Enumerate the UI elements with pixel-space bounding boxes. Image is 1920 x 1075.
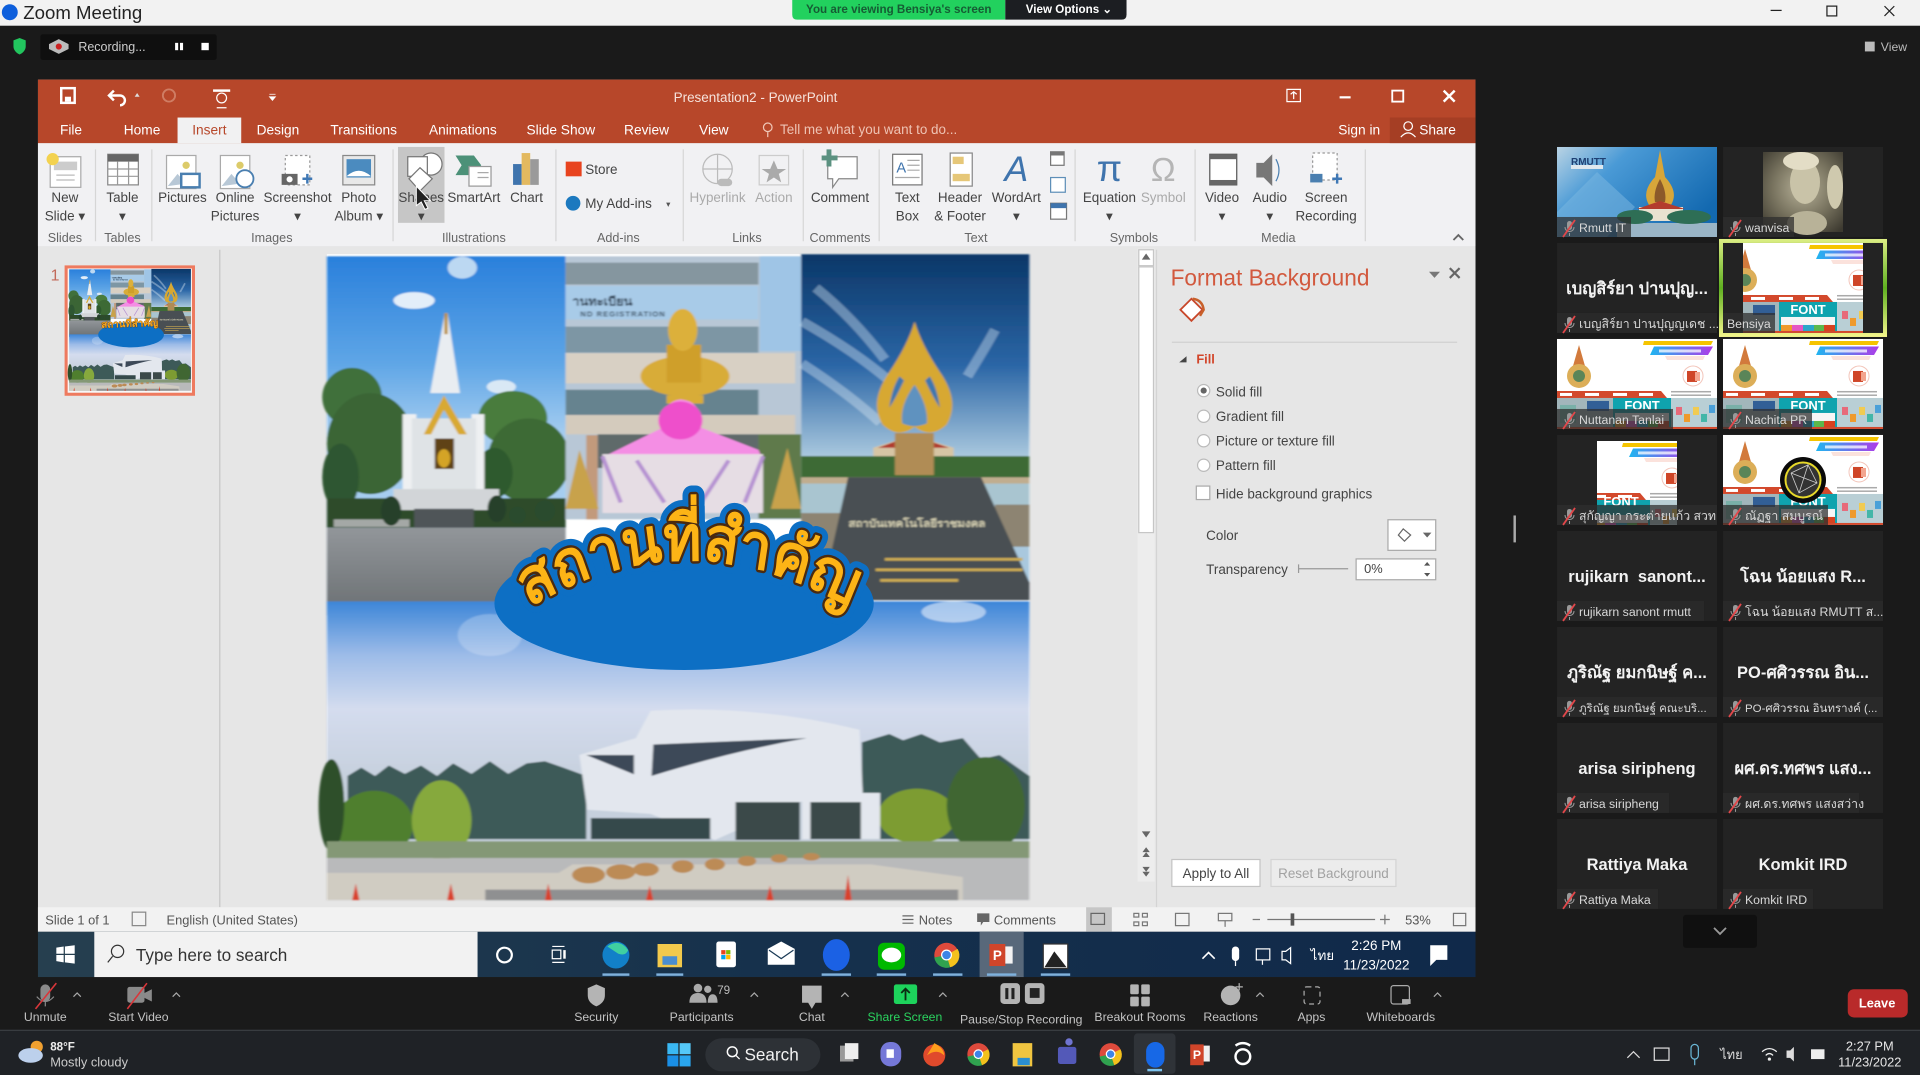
start button (667, 1043, 691, 1066)
system tray: 2:26 PM (1351, 938, 1401, 953)
ribbon button: screenshot: Screenshot (264, 190, 332, 205)
ribbon button: screen recording: Recording (1295, 208, 1357, 223)
start button (56, 945, 75, 964)
ribbon button: wordart: WordArt (992, 190, 1041, 205)
participant tile: PO-ศศิวรรณ (1723, 627, 1883, 717)
system tray: 11/23/2022 (1838, 1054, 1901, 1069)
ribbon button: table: ▾ (119, 208, 126, 223)
ribbon group labels: Images (251, 231, 293, 245)
slide thumbnail pane (51, 250, 220, 907)
ribbon group labels: Slides (48, 231, 82, 245)
ribbon tabs: Share (1419, 123, 1456, 138)
ribbon group labels: Add-ins (597, 231, 640, 245)
ribbon button: shapes (398, 153, 444, 223)
ribbon button: equation: Equation (1083, 190, 1136, 205)
fill section (1179, 352, 1436, 580)
slide scrollbar (1138, 249, 1155, 882)
powerpoint status bar (38, 907, 1476, 932)
shared windows 10 taskbar (38, 932, 1476, 977)
ribbon button: smartart (447, 155, 501, 205)
slide thumbnail pane: 1 (51, 267, 60, 284)
fill section: Color (1206, 528, 1239, 543)
ribbon button: my add-ins: My Add-ins (585, 196, 652, 211)
ribbon tabs (60, 118, 1476, 143)
ribbon button: pictures: Pictures (158, 190, 207, 205)
unmute control (24, 983, 81, 1024)
ribbon button: screenshot: ▾ (294, 208, 301, 223)
ribbon button: store: Store (585, 162, 617, 177)
chat control (799, 986, 849, 1024)
windows 11 taskbar (0, 1030, 1920, 1075)
ribbon button: comment (811, 149, 869, 205)
fill section: Gradient fill (1216, 409, 1284, 424)
participant tile: rujikarn sanont: rujikarn sanont rmutt (1579, 605, 1692, 619)
participant tile: Rmutt IT: Rmutt IT (1579, 221, 1627, 235)
start video control: Start Video (108, 1010, 169, 1024)
ribbon button: text box: Text (895, 190, 920, 205)
ribbon button: video: ▾ (1219, 208, 1226, 223)
participant tile: PO-ศศิวรรณ: PO-ศศิวรรณ อินทรางค์ (... (1745, 701, 1877, 715)
apply to all button: Apply to All (1183, 866, 1249, 881)
security control: Security (574, 1010, 619, 1024)
ribbon group labels: Links (732, 231, 762, 245)
ribbon button: action (755, 155, 793, 205)
ribbon button: audio: ▾ (1266, 208, 1273, 223)
participant tile: Komkit IRD (1723, 819, 1883, 909)
ribbon tabs: Design (257, 123, 299, 138)
participant tile: Komkit IRD: Komkit IRD (1745, 893, 1807, 907)
ribbon tabs: Insert (192, 123, 227, 138)
fill bucket icon (1180, 299, 1204, 321)
participant tile: wanvisa: wanvisa (1744, 221, 1790, 235)
search box (94, 932, 478, 977)
ribbon button: table: Table (106, 190, 139, 205)
active speaker tile: Bensiya: Bensiya (1727, 317, 1771, 331)
participant tile: ผศ.ดร.ทศพร แสงสว่าง: ผศ.ดร.ทศพร แสง... (1735, 760, 1871, 778)
participant tile: ภูริณัฐ ยมกนิษฐ์: ภูริณัฐ ยมกนิษฐ์ คณะบริ... (1579, 701, 1707, 715)
participant tile: โฉน น้อยแสง: โฉน น้อยแสง RMUTT ส... (1745, 604, 1883, 619)
ribbon button: my add-ins: ▾ (666, 199, 671, 209)
ribbon button: new slide: Slide ▾ (45, 208, 85, 223)
ribbon group labels: Illustrations (442, 231, 506, 245)
ribbon button: wordart: ▾ (1013, 208, 1020, 223)
fill section: Picture or texture fill (1216, 434, 1335, 449)
participant tile: ณัฏฐา สมบูรณ์: ณัฏฐา สมบูรณ์ (1745, 509, 1823, 524)
ribbon tabs: Tell me what you want to do... (780, 122, 957, 137)
participant tile: ณัฏฐา สมบูรณ์ (1723, 435, 1883, 525)
system tray (1627, 1039, 1901, 1069)
ribbon button: video (1205, 154, 1239, 223)
participant tile: เบญสิร์ยา ปานปุญ: เบญสิร์ยา ปานปุญญเดช ... (1579, 317, 1719, 332)
reactions control: Reactions (1203, 1010, 1258, 1024)
participant tile: Rmutt IT: RMUTT (1571, 157, 1606, 168)
participant tile: Nachita PR (1723, 339, 1883, 429)
ribbon group labels (48, 231, 1463, 245)
fill section: 0% (1364, 561, 1383, 576)
breakout rooms control: Breakout Rooms (1094, 1010, 1186, 1024)
photo: white modern building (319, 601, 1029, 900)
ribbon (38, 143, 1476, 246)
ribbon group labels: Comments (810, 231, 870, 245)
ribbon group labels: Symbols (1110, 231, 1158, 245)
participant tile: Komkit IRD: Komkit IRD (1759, 856, 1848, 874)
photo: white shrine (322, 256, 570, 615)
screen share banner: You are viewing Bensiya's screen (806, 3, 991, 16)
active speaker tile: Bensiya (1719, 239, 1887, 337)
participant tile: arisa siripheng: arisa siripheng (1578, 760, 1696, 778)
ribbon button: shapes: ▾ (418, 208, 425, 223)
ribbon tabs: File (60, 123, 82, 138)
photo: golden emblem monument: สถาบันเทคโนโลยีราชมงคล (848, 516, 986, 530)
taskbar icons (497, 932, 1070, 977)
ribbon button: pictures (158, 155, 207, 205)
participant tile: rujikarn sanont: rujikarn sanont... (1568, 568, 1706, 586)
ribbon button: header and footer (934, 153, 986, 223)
ribbon button: equation (1083, 148, 1136, 223)
participants control: Participants (670, 1010, 734, 1024)
gallery next page arrow (1683, 915, 1757, 948)
taskbar icons (840, 1033, 1250, 1074)
ribbon tabs: View (699, 123, 729, 138)
title: สถานที่สำคัญ: สถานที่สำคัญ (511, 486, 870, 584)
whiteboards control (1366, 986, 1441, 1024)
participants control: 79 (717, 984, 730, 997)
participant tile: ผศ.ดร.ทศพร แสงสว่าง: ผศ.ดร.ทศพร แสงสว่าง (1745, 797, 1864, 811)
ribbon button: text box (893, 154, 922, 223)
ribbon button: screenshot (264, 155, 332, 223)
ribbon button: photo album (334, 155, 383, 223)
participant tile: Nuttanan Tanlai: FONT (1624, 398, 1660, 413)
ribbon group labels: Media (1261, 231, 1297, 245)
photo: golden emblem monument (801, 254, 1029, 600)
weather widget (18, 1041, 129, 1069)
title: สถานที่สำคัญ: สถานที่สำคัญ (516, 492, 864, 618)
active speaker tile: Bensiya: FONT (1790, 302, 1826, 317)
zoom title bar: Zoom Meeting (23, 2, 142, 23)
ribbon button: photo album: Photo (341, 190, 376, 205)
participant tile: Nachita PR: Nachita PR (1745, 413, 1807, 427)
security shield icon (13, 38, 26, 54)
ribbon group labels: Text (964, 231, 988, 245)
ribbon button: my add-ins (566, 196, 671, 211)
screen share banner: View Options ⌄ (1026, 3, 1112, 16)
security control (574, 984, 619, 1024)
taskbar icons: P (993, 948, 1002, 963)
ribbon tabs: Sign in (1338, 123, 1380, 138)
powerpoint title bar (38, 80, 1476, 143)
participant tile: Nuttanan Tanlai: Nuttanan Tanlai (1579, 413, 1664, 427)
ribbon button: photo album: Album ▾ (334, 208, 383, 223)
slide thumbnail pane: สถานที่สำคัญ (101, 315, 158, 331)
participant tile: arisa siripheng (1557, 723, 1717, 813)
powerpoint window (38, 80, 1476, 932)
participant tile: Rmutt IT (1557, 147, 1717, 237)
participant tile: สุกัญญา กระต่ายแก้ว (1557, 435, 1717, 526)
ribbon button: equation: ▾ (1106, 208, 1113, 223)
participant tile: เบญสิร์ยา ปานปุญ (1557, 243, 1719, 333)
fill section: Hide background graphics (1216, 486, 1373, 501)
ribbon button: symbol (1141, 152, 1186, 205)
share screen control: Share Screen (867, 1010, 942, 1024)
ribbon tabs: Animations (429, 123, 497, 138)
fill section: Fill (1196, 352, 1215, 367)
ribbon button: new slide (45, 153, 85, 223)
ribbon button: audio: Audio (1253, 190, 1287, 205)
screen share banner (792, 0, 1127, 20)
zoom meeting toolbar (24, 983, 1908, 1027)
ribbon small buttons: date, number, object (1051, 152, 1067, 219)
slide canvas: main slide collage (316, 253, 1032, 902)
ribbon button: text box: Box (896, 208, 919, 223)
reset background button: Reset Background (1278, 866, 1389, 881)
participant tile: เบญสิร์ยา ปานปุญ: เบญสิร์ยา ปานปุญ... (1566, 279, 1708, 299)
participant tile: ณัฏฐา สมบูรณ์: FONT (1790, 494, 1826, 509)
participant tile: PO-ศศิวรรณ: PO-ศศิวรรณ อิน... (1737, 663, 1869, 682)
participant tile: arisa siripheng: arisa siripheng (1579, 797, 1659, 811)
photo: golden bust and registration building: ND REGISTRATION (580, 310, 666, 318)
powerpoint status bar: Comments (994, 912, 1056, 927)
ribbon group labels: Tables (104, 231, 141, 245)
ribbon button: online pictures (211, 155, 260, 223)
powerpoint title bar: Presentation2 - PowerPoint (674, 90, 838, 105)
ribbon button: header and footer: & Footer (934, 208, 986, 223)
ribbon button: hyperlink: Hyperlink (690, 190, 746, 205)
participant tile: โฉน น้อยแสง: โฉน น้อยแสง R... (1739, 566, 1866, 586)
powerpoint status bar: 53% (1405, 912, 1431, 927)
ribbon button: screen recording: Screen (1305, 190, 1347, 205)
title shape: blue ellipse (494, 537, 874, 670)
panel close controls (1429, 268, 1460, 278)
photo: golden bust and registration building: านทะเบียน (572, 295, 633, 308)
ribbon button: header and footer: Header (938, 190, 983, 205)
powerpoint status bar: Notes (919, 912, 952, 927)
view button: View (1881, 40, 1907, 54)
ribbon button: new slide: New (51, 190, 79, 205)
ribbon button: hyperlink (690, 154, 746, 205)
start video control (108, 983, 180, 1024)
reset background button (1271, 860, 1396, 886)
ribbon button: screen recording (1295, 153, 1357, 223)
panel heading: Format Background (1171, 264, 1369, 290)
ribbon button: action: Action (755, 190, 793, 205)
pause stop recording control: Pause/Stop Recording (960, 1013, 1083, 1027)
unmute control: Unmute (24, 1010, 67, 1024)
view button (1865, 40, 1907, 54)
participant tile: Nachita PR: FONT (1790, 398, 1826, 413)
fill section: Pattern fill (1216, 458, 1276, 473)
system tray (1202, 938, 1447, 973)
participant tile: โฉน น้อยแสง (1723, 531, 1883, 621)
participant tile: สุกัญญา กระต่ายแก้ว: สุกัญญา กระต่ายแก้ว สวท (1579, 509, 1716, 524)
ribbon button: video: Video (1205, 190, 1239, 205)
system tray: 2:27 PM (1846, 1039, 1894, 1054)
leave button (1848, 989, 1908, 1017)
recording indicator (40, 34, 217, 60)
ribbon button: equation: π (1097, 148, 1122, 189)
mouse cursor (416, 186, 430, 209)
ribbon button: wordart: A (1002, 149, 1028, 189)
pause stop recording control (960, 983, 1083, 1027)
ribbon button: store (566, 162, 617, 177)
ribbon button: table (106, 154, 139, 223)
participants control (670, 984, 758, 1024)
ribbon button: symbol: Symbol (1141, 190, 1186, 205)
search box: Type here to search (136, 945, 287, 965)
whiteboards control: Whiteboards (1366, 1010, 1435, 1024)
system tray: 11/23/2022 (1343, 958, 1409, 973)
search pill: Search (744, 1044, 799, 1064)
format background panel (1157, 250, 1460, 907)
powerpoint status bar: English (United States) (167, 912, 298, 927)
weather widget: 88°F (50, 1041, 75, 1054)
ribbon button: wordart (992, 149, 1041, 223)
panel divider handle (1513, 515, 1516, 542)
ribbon button: chart (510, 153, 543, 205)
share screen control (867, 984, 947, 1024)
ribbon button: chart: Chart (510, 190, 543, 205)
recording indicator: Recording... (78, 40, 146, 54)
participants gallery (1536, 147, 1887, 948)
participant tile: ภูริณัฐ ยมกนิษฐ์ (1557, 627, 1717, 717)
ribbon button: audio (1253, 154, 1287, 223)
ribbon tabs: Transitions (330, 123, 397, 138)
participant tile: wanvisa (1723, 147, 1883, 237)
ribbon button: smartart: SmartArt (447, 190, 501, 205)
participant tile: Rattiya Maka: Rattiya Maka (1579, 893, 1651, 907)
search pill (705, 1038, 820, 1071)
ribbon button: symbol: Ω (1151, 152, 1176, 189)
ribbon tabs: Review (624, 123, 669, 138)
participant tile: Nuttanan Tanlai (1557, 339, 1717, 429)
leave button: Leave (1859, 996, 1895, 1011)
apps control (1297, 987, 1325, 1024)
system tray: ไทย (1310, 948, 1334, 963)
ribbon tabs: Slide Show (527, 123, 595, 138)
apps control: Apps (1297, 1010, 1325, 1024)
participant tile: สุกัญญา กระต่ายแก้ว: FONT (1603, 494, 1639, 509)
participant tile: rujikarn sanont (1557, 531, 1717, 621)
system tray: ไทย (1719, 1047, 1743, 1062)
zoom title bar (0, 0, 1920, 26)
ribbon button: text box: A (896, 161, 906, 177)
fill section: Transparency (1206, 562, 1288, 577)
weather widget: Mostly cloudy (50, 1054, 129, 1069)
ribbon tabs: Home (124, 123, 161, 138)
ribbon button: online pictures: Online (216, 190, 255, 205)
breakout rooms control (1094, 984, 1186, 1024)
participant tile: Rattiya Maka: Rattiya Maka (1587, 856, 1688, 874)
ribbon button: online pictures: Pictures (211, 208, 260, 223)
powerpoint status bar: Slide 1 of 1 (45, 912, 110, 927)
fill section: Solid fill (1216, 385, 1262, 400)
photo: golden bust and registration building (566, 256, 801, 519)
chat control: Chat (799, 1010, 825, 1024)
participant tile: ผศ.ดร.ทศพร แสงสว่าง (1723, 723, 1883, 813)
ribbon button: shapes: Shapes (398, 190, 444, 205)
ribbon button: comment: Comment (811, 190, 869, 205)
taskbar icons: P (1193, 1048, 1201, 1062)
participant tile: ภูริณัฐ ยมกนิษฐ์: ภูริณัฐ ยมกนิษฐ์ ค... (1567, 663, 1707, 684)
participant tile: Rattiya Maka (1557, 819, 1717, 909)
reactions control (1203, 983, 1264, 1024)
apply to all button (1172, 860, 1260, 886)
